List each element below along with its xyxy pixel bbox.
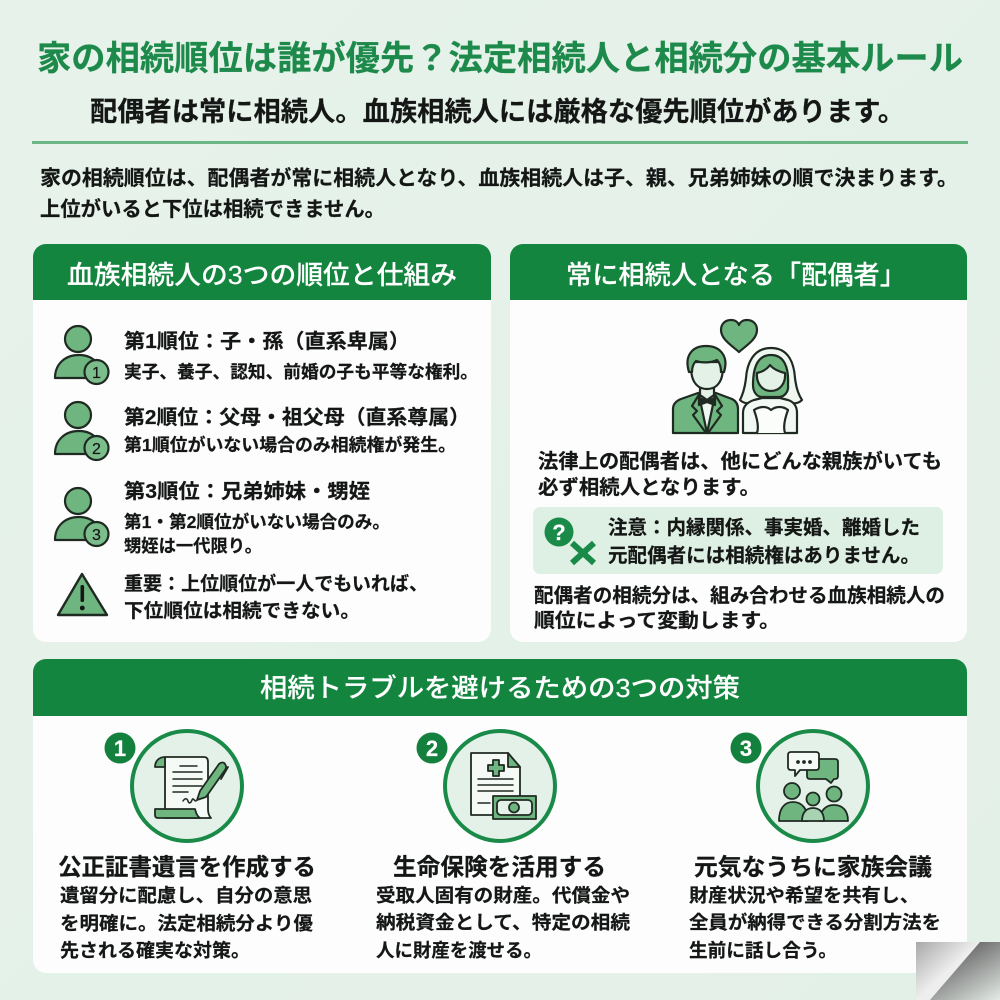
spouse description: 必ず相続人となります。 xyxy=(538,476,760,499)
rank 1 text xyxy=(124,330,478,382)
measure 3 text: 財産状況や希望を共有し、 xyxy=(689,885,919,906)
icon: person rank 2: 2 xyxy=(92,441,101,458)
panel: spouse xyxy=(510,244,967,642)
rank 2 text: 第1順位がいない場合のみ相続権が発生。 xyxy=(124,434,456,455)
measure 2 text xyxy=(376,854,631,961)
callout: caution xyxy=(533,507,943,574)
spouse share text xyxy=(534,585,945,632)
measure 2 icon: insurance and money xyxy=(416,731,555,841)
measure 1 text xyxy=(58,854,316,961)
panel: three measures xyxy=(33,659,967,973)
icon: person rank 1 xyxy=(55,326,108,384)
measure 2 text: 納税資金として、特定の相続 xyxy=(376,912,631,933)
measure 1 text: 公正証書遺言を作成する xyxy=(58,854,316,880)
panel header: blood relatives: 血族相続人の3つの順位と仕組み xyxy=(67,260,457,290)
rank 2 text xyxy=(124,406,470,455)
panel header: spouse xyxy=(510,244,967,300)
subtitle: 配偶者は常に相続人。血族相続人には厳格な優先順位があります。 xyxy=(90,96,905,127)
icon: person rank 3: 3 xyxy=(92,527,101,544)
measure 1 icon: will xyxy=(104,731,242,841)
measure 3 text: 元気なうちに家族会議 xyxy=(694,854,932,880)
icon: question and cross xyxy=(544,518,594,563)
spouse description: 法律上の配偶者は、他にどんな親族がいても xyxy=(538,449,942,473)
rank 3 text: 第1・第2順位がいない場合のみ。 xyxy=(124,511,390,532)
panel header: spouse: 常に相続人となる「配偶者」 xyxy=(566,260,906,290)
icon: question and cross: ? xyxy=(552,520,566,545)
callout: caution: 注意：内縁関係、事実婚、離婚した xyxy=(608,517,920,539)
title: 家の相続順位は誰が優先？法定相続人と相続分の基本ルール xyxy=(37,39,963,78)
icon: person rank 1: 1 xyxy=(92,365,101,382)
spouse share text: 配偶者の相続分は、組み合わせる血族相続人の xyxy=(534,585,945,607)
rank 2 text: 第2順位：父母・祖父母（直系尊属） xyxy=(124,406,470,429)
important note: 重要：上位順位が一人でもいれば、 xyxy=(124,572,428,595)
panel: blood relative heirs xyxy=(33,244,491,642)
icon: person rank 3 xyxy=(55,488,108,546)
important note: 下位順位は相続できない。 xyxy=(124,600,360,622)
rank 3 text: 甥姪は一代限り。 xyxy=(124,536,262,556)
panel header: measures xyxy=(33,659,967,716)
panel header: blood relatives xyxy=(33,244,491,300)
important note xyxy=(124,572,428,622)
rank 3 text: 第3順位：兄弟姉妹・甥姪 xyxy=(124,480,370,503)
rank 3 text xyxy=(124,480,390,556)
panel header: measures: 相続トラブルを避けるための3つの対策 xyxy=(260,673,740,703)
callout: caution: 元配偶者には相続権はありません。 xyxy=(608,545,920,567)
page curl corner xyxy=(916,942,1000,1000)
measure 1 icon: will: 1 xyxy=(114,736,126,761)
rank 1 text: 第1順位：子・孫（直系卑属） xyxy=(124,330,410,353)
measure 3 icon: family meeting xyxy=(730,731,868,841)
measure 1 text: を明確に。法定相続分より優 xyxy=(60,913,314,934)
measure 3 icon: family meeting: 3 xyxy=(740,736,752,761)
measure 2 text: 受取人固有の財産。代償金や xyxy=(376,885,630,906)
intro text xyxy=(40,166,958,221)
measure 1 text: 先される確実な対策。 xyxy=(60,940,250,961)
measure 3 text: 生前に話し合う。 xyxy=(689,940,837,961)
measure 2 text: 生命保険を活用する xyxy=(393,854,606,880)
spouse description xyxy=(538,449,942,499)
icon: person rank 2 xyxy=(55,402,108,460)
measure 3 text xyxy=(689,854,941,961)
spouse share text: 順位によって変動します。 xyxy=(534,610,780,632)
rank 1 text: 実子、養子、認知、前婚の子も平等な権利。 xyxy=(124,361,478,382)
measure 3 text: 全員が納得できる分割方法を xyxy=(689,912,941,933)
measure 1 text: 遺留分に配慮し、自分の意思 xyxy=(60,885,312,906)
icon: warning triangle xyxy=(58,574,107,615)
intro text: 上位がいると下位は相続できません。 xyxy=(40,197,385,221)
intro text: 家の相続順位は、配偶者が常に相続人となり、血族相続人は子、親、兄弟姉妹の順で決まります。 xyxy=(40,166,958,190)
measure 2 text: 人に財産を渡せる。 xyxy=(376,940,542,961)
measure 2 icon: insurance and money: 2 xyxy=(426,736,438,761)
icon: couple with heart xyxy=(673,320,802,433)
